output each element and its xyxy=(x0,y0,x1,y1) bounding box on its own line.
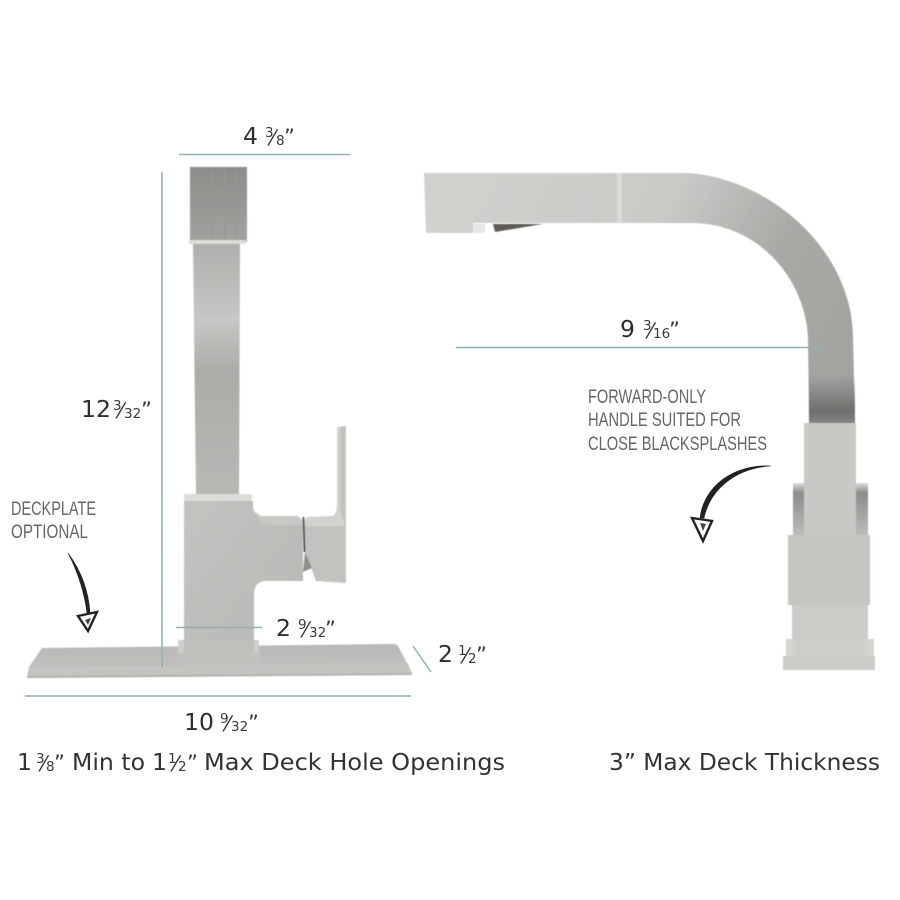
faucet stem xyxy=(193,244,240,497)
caption: deck hole openings: 8 xyxy=(46,759,55,775)
caption: deck hole openings: ⁄ xyxy=(170,752,182,776)
note: deckplate optional xyxy=(11,499,96,543)
faucet body xyxy=(184,494,303,652)
dimension: 10 9/32: 10 xyxy=(184,708,214,736)
dimension: 9 3/16: ⁄ xyxy=(645,319,657,343)
handle ears xyxy=(793,483,868,537)
dimension: 12 3/32: 3 xyxy=(113,398,122,414)
dimension: 4 3/8: 8 xyxy=(276,133,285,149)
dimension: 4 3/8: 3 xyxy=(265,125,274,141)
caption: deck hole openings xyxy=(17,748,505,776)
dimension: 2 1/2: ” xyxy=(476,643,487,667)
dimension: 2 1/2: 2 xyxy=(468,651,477,667)
dimension: 10 9/32: ” xyxy=(248,711,259,735)
caption: deck thickness: 3” Max Deck Thickness xyxy=(609,748,880,776)
faucet base xyxy=(177,640,261,664)
base xyxy=(783,639,875,670)
note: forward-only handle xyxy=(588,387,767,455)
note: forward-only handle: FORWARD-ONLY xyxy=(588,387,706,408)
caption: deck hole openings: ” xyxy=(54,751,65,775)
caption: deck hole openings: ⁄ xyxy=(38,752,50,776)
left faucet, front view xyxy=(27,167,412,678)
dimension: 4 3/8: 4 xyxy=(243,122,258,150)
dimension: 2 9/32: 32 xyxy=(309,625,326,641)
dimension lines xyxy=(25,154,825,696)
faucet handle xyxy=(303,426,346,583)
caption: deck hole openings: Max Deck Hole Openings xyxy=(204,748,505,776)
dimension: 2 9/32: 2 xyxy=(276,614,291,642)
dimension: 2 9/32: 9 xyxy=(298,617,307,633)
dimension: 10 9/32: 9 xyxy=(220,711,229,727)
deckplate xyxy=(27,644,412,678)
right faucet, side view xyxy=(424,173,875,670)
spray trigger xyxy=(493,224,543,232)
caption: deck hole openings: 3 xyxy=(36,751,45,767)
dimension: 9 3/16: ” xyxy=(669,318,680,342)
dimension: 9 3/16: 9 xyxy=(620,315,635,343)
caption: deck hole openings: 1 xyxy=(17,748,32,776)
note: deckplate optional: OPTIONAL xyxy=(11,522,88,543)
arrow: to handle xyxy=(692,466,771,541)
note: forward-only handle: HANDLE SUITED FOR xyxy=(588,410,741,431)
dimension: 2 1/2: 1 xyxy=(458,643,467,659)
dimension: 12 3/32: 12 xyxy=(81,395,111,423)
dimension: 4 3/8: ” xyxy=(284,125,295,149)
caption: deck hole openings: Min to xyxy=(72,748,145,776)
dimension: 10 9/32: 32 xyxy=(231,719,248,735)
dimension: 9 3/16: 3 xyxy=(643,318,652,334)
dimension: 12 3/32: 32 xyxy=(124,406,141,422)
arrow: to deckplate xyxy=(68,553,97,631)
dimension: 12 3/32: ” xyxy=(141,398,152,422)
dimension: 4 3/8: ⁄ xyxy=(267,126,279,150)
faucet spout head xyxy=(189,167,247,244)
dimension: 2 1/2: ⁄ xyxy=(460,644,472,668)
dimension: 12 3/32: ⁄ xyxy=(115,399,127,423)
spout xyxy=(424,173,855,423)
dimension: 10 9/32: ⁄ xyxy=(222,712,234,736)
caption: deck hole openings: 1 xyxy=(152,748,167,776)
caption: deck hole openings: 1 xyxy=(168,751,177,767)
note: forward-only handle: CLOSE BLACKSPLASHES xyxy=(588,434,767,455)
caption: deck hole openings: 2 xyxy=(178,759,187,775)
dimension: 2 9/32: ⁄ xyxy=(300,618,312,642)
collar and body xyxy=(788,423,870,645)
dimension: 2 1/2: 2 xyxy=(438,640,453,668)
caption: deck hole openings: ” xyxy=(187,751,198,775)
dimension: 9 3/16: 16 xyxy=(653,326,670,342)
note: deckplate optional: DECKPLATE xyxy=(11,499,96,520)
dimension: 2 9/32: ” xyxy=(325,617,336,641)
